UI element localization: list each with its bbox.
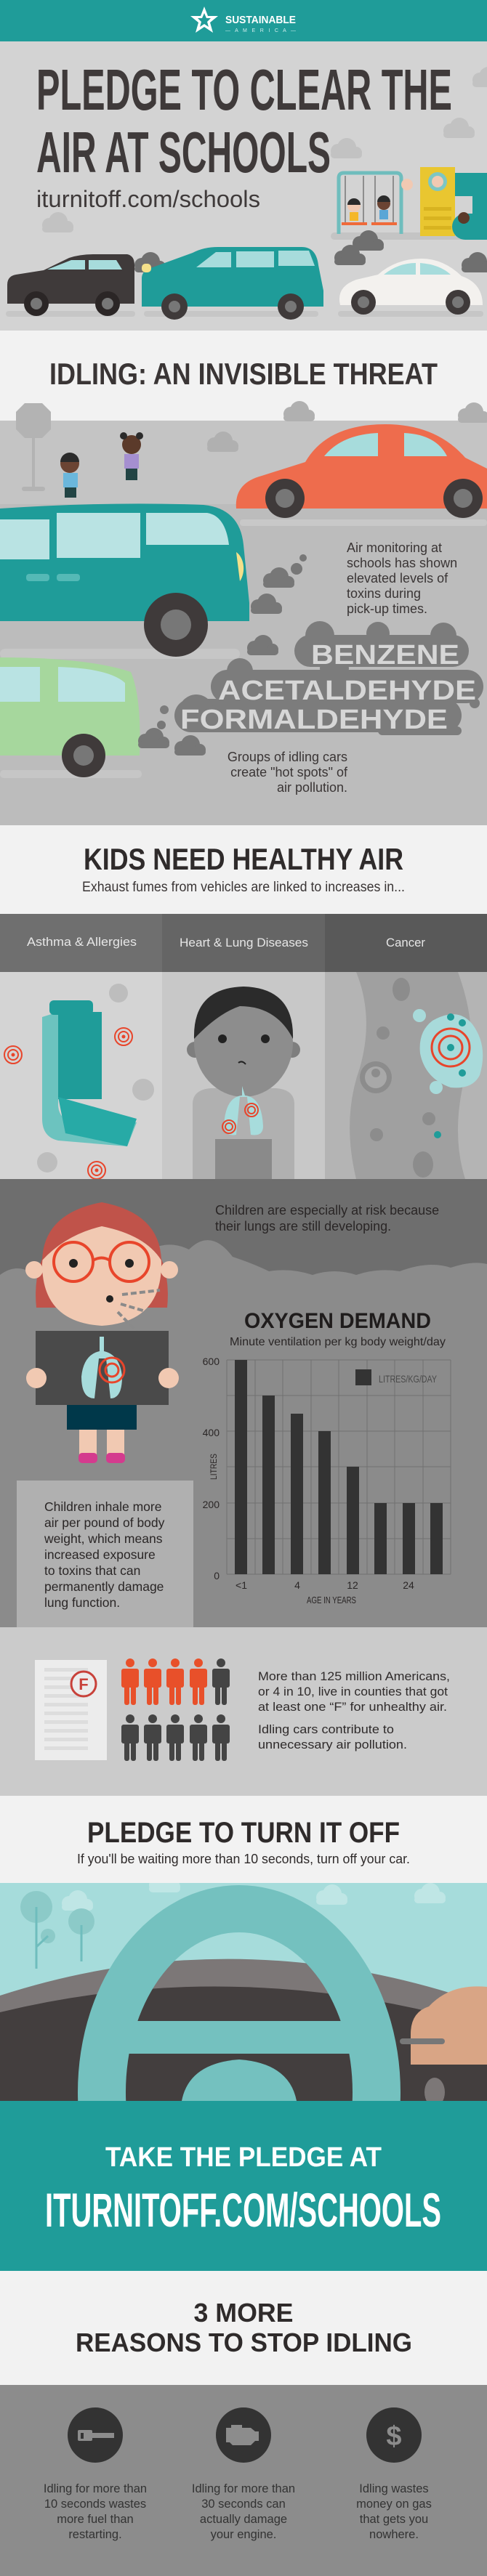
panel: 3 more reasons heading <box>0 2271 487 2385</box>
icon: report card <box>35 1660 107 1760</box>
text: air monitoring: toxins during <box>347 586 421 601</box>
kids <box>60 432 143 498</box>
car: black <box>7 254 134 316</box>
text: hot spots: create "hot spots" of <box>230 765 348 779</box>
icon: inhaler <box>42 1000 137 1146</box>
chart: oxygen demand: Minute ventilation per kg body weight/day <box>230 1336 446 1348</box>
text box: inhale more air: increased exposure <box>44 1547 156 1562</box>
url: iturnitoff.com/schools <box>36 186 260 212</box>
exhaust puffs <box>138 554 307 756</box>
reason: money: Idling wastes <box>359 2482 429 2495</box>
subheading: Exhaust fumes from vehicles are linked to increases in... <box>82 880 405 895</box>
panel: unhealthy air grade <box>0 1627 487 1796</box>
reason: money <box>356 2407 432 2541</box>
reason: money: money on gas <box>356 2498 432 2511</box>
panel: take the pledge: TAKE THE PLEDGE AT <box>105 2142 382 2173</box>
exhaust clouds <box>134 230 487 272</box>
heading: kids: KIDS NEED HEALTHY AIR <box>84 842 403 876</box>
chart: oxygen demand: AGE IN YEARS <box>307 1595 356 1605</box>
text: hot spots: air pollution. <box>277 780 347 795</box>
logo text: SUSTAINABLE <box>225 14 296 26</box>
reason: money: that gets you <box>360 2513 428 2526</box>
chart: oxygen demand: OXYGEN DEMAND <box>244 1309 431 1333</box>
icon: tumor <box>413 1009 483 1138</box>
reason: fuel: restarting. <box>68 2528 122 2541</box>
text box: inhale more air: lung function. <box>44 1595 120 1610</box>
panel: take the pledge <box>0 2101 487 2271</box>
logo text: — A M E R I C A — <box>225 28 296 33</box>
chart: oxygen demand: LITRES <box>209 1454 219 1480</box>
toxin clouds: ACETALDEHYDE <box>218 676 476 706</box>
reason: fuel: Idling for more than <box>44 2482 147 2495</box>
chart: oxygen demand: 0 <box>214 1570 220 1581</box>
logo text <box>225 14 296 33</box>
text: still developing <box>215 1203 439 1234</box>
panel: 3 more reasons heading: REASONS TO STOP IDLING <box>76 2328 412 2357</box>
panel: reasons <box>0 2385 487 2576</box>
chart: oxygen demand: 4 <box>294 1579 300 1591</box>
text box: inhale more air: weight, which means <box>44 1531 163 1546</box>
chart: oxygen demand: 12 <box>347 1579 358 1591</box>
title <box>36 57 452 185</box>
toxin clouds <box>160 621 483 735</box>
reason: money: nowhere. <box>369 2528 419 2541</box>
scene: idling cars <box>0 401 487 825</box>
text: 125 million: or 4 in 10, live in counties that got <box>258 1685 448 1698</box>
text box: inhale more air <box>17 1481 193 1627</box>
header: sustainable america logo <box>0 0 487 41</box>
icons: targets <box>4 1028 132 1179</box>
reason: engine <box>192 2407 295 2541</box>
reason: fuel: more fuel than <box>57 2513 134 2526</box>
car: orange <box>236 424 487 526</box>
reason: engine: actually damage <box>200 2513 287 2526</box>
icon: people 4 in 10 <box>121 1658 230 1761</box>
toxin clouds: BENZENE <box>311 640 459 671</box>
reason: money: $ <box>386 2421 402 2452</box>
reason: engine: Idling for more than <box>192 2482 295 2495</box>
text box: inhale more air: to toxins that can <box>44 1563 140 1578</box>
road strips <box>6 311 483 317</box>
icon: girl with x-ray <box>25 1202 179 1463</box>
text: 125 million: unnecessary air pollution. <box>258 1738 407 1751</box>
panel: cancer <box>325 972 487 1179</box>
icon: star logo <box>190 7 218 33</box>
text: 125 million: Idling cars contribute to <box>258 1722 394 1736</box>
text: hot spots <box>228 750 348 795</box>
chart: oxygen demand: 400 <box>203 1427 220 1438</box>
text: hot spots: Groups of idling cars <box>228 750 347 764</box>
panel: hero <box>0 41 487 331</box>
text: air monitoring: elevated levels of <box>347 571 448 586</box>
panel: pledge to turn it off <box>0 1796 487 1883</box>
icon: report card: F <box>79 1675 89 1693</box>
chart: oxygen demand: 600 <box>203 1356 220 1367</box>
text box: inhale more air: air per pound of body <box>44 1515 165 1530</box>
text box: inhale more air: Children inhale more <box>44 1499 161 1514</box>
tabs: Heart & Lung Diseases <box>180 936 308 949</box>
toxin clouds: FORMALDEHYDE <box>180 705 448 735</box>
text: still developing: their lungs are still developing. <box>215 1219 391 1234</box>
panel: heart and lung <box>162 972 325 1179</box>
illustration: steering wheel <box>0 1872 487 2299</box>
text: still developing: Children are especially at risk because <box>215 1203 439 1218</box>
tabs <box>0 914 487 972</box>
reason: fuel: 10 seconds wastes <box>44 2498 146 2511</box>
car: white <box>339 259 483 315</box>
text: air monitoring <box>347 540 457 616</box>
panel: oxygen demand <box>0 1179 487 1627</box>
text box: inhale more air: permanently damage <box>44 1579 164 1594</box>
tabs: Asthma & Allergies <box>27 935 137 949</box>
subheading: 10 seconds: If you'll be waiting more than 10 seconds, turn off your car. <box>77 1852 410 1866</box>
reason: engine: your engine. <box>211 2528 276 2541</box>
panel: asthma <box>0 972 162 1179</box>
tabs: Cancer <box>386 936 425 949</box>
chart: oxygen demand: 200 <box>203 1499 220 1510</box>
text: 125 million <box>258 1669 450 1751</box>
chart: oxygen demand: 24 <box>403 1579 414 1591</box>
panel: kids need healthy air <box>0 825 487 1179</box>
text: 125 million: More than 125 million Americans, <box>258 1669 450 1683</box>
reason: engine: 30 seconds can <box>201 2498 286 2511</box>
chart: oxygen demand <box>203 1309 451 1605</box>
text: air monitoring: pick-up times. <box>347 602 427 616</box>
text: air monitoring: Air monitoring at <box>347 540 442 555</box>
text: air monitoring: schools has shown <box>347 556 457 570</box>
icon: stop sign <box>16 403 51 491</box>
text: 125 million: at least one “F” for unhealthy air. <box>258 1700 447 1714</box>
panel: 3 more reasons heading: 3 MORE <box>193 2298 294 2328</box>
car: green <box>0 657 142 778</box>
car: teal van <box>142 247 323 320</box>
playground <box>331 167 487 240</box>
chart: oxygen demand: <1 <box>236 1579 247 1591</box>
heading: pledge: PLEDGE TO TURN IT OFF <box>87 1817 400 1849</box>
chart: oxygen demand: LITRES/KG/DAY <box>379 1373 437 1385</box>
icon: boy <box>187 987 300 1179</box>
panel: idling <box>0 331 487 825</box>
reason: fuel <box>44 2407 147 2541</box>
car: teal van <box>0 503 249 659</box>
